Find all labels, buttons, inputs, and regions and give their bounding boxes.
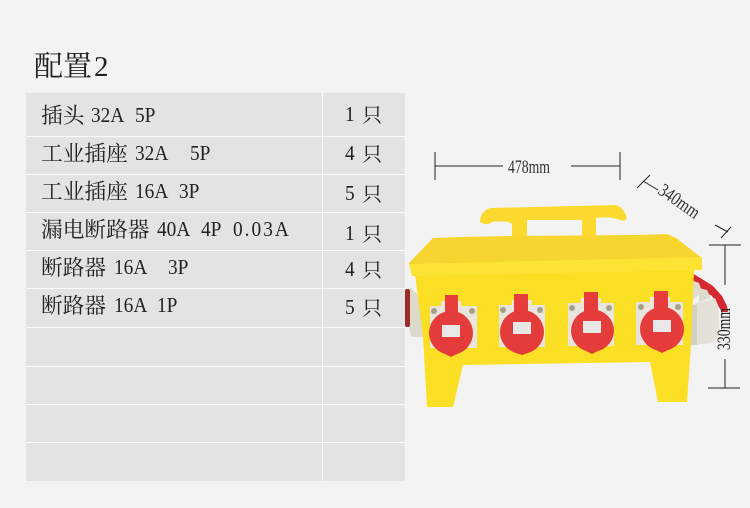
row 2 quantity [345, 138, 382, 167]
row 4 quantity: 1 [345, 221, 355, 245]
socket 2 [499, 294, 545, 355]
row 3 item: 工业插座 [41, 175, 128, 206]
row 5 item: 3P [168, 255, 188, 279]
socket 4 [636, 291, 684, 353]
row 5 item: 断路器 [41, 251, 106, 282]
row 4 quantity [345, 218, 382, 247]
row 3 quantity [345, 178, 382, 207]
left side plug [405, 287, 423, 337]
row 1 item: 5P [135, 103, 155, 127]
row 6 quantity: 5 [345, 295, 355, 319]
row 5 item [41, 251, 188, 282]
row 1 item [41, 99, 155, 130]
row 6 item: 16A [114, 293, 147, 317]
row 3 quantity: 只 [362, 178, 382, 207]
box body [415, 270, 694, 407]
row 2 item [41, 137, 210, 168]
dimension: depth 340mm: 340mm [654, 180, 704, 224]
dimension: height 330mm: 330mm [714, 308, 735, 350]
row 2 item: 工业插座 [41, 137, 128, 168]
row 6 item [41, 289, 177, 320]
row 5 quantity [345, 254, 382, 283]
row 4 item [41, 213, 291, 244]
row 1 quantity: 1 [345, 102, 355, 126]
dimension: depth 340mm [637, 175, 731, 238]
row 3 item: 16A [135, 179, 168, 203]
row 2 quantity: 4 [345, 141, 355, 165]
lid handle [480, 205, 627, 238]
row 6 item: 1P [157, 293, 177, 317]
row 3 quantity: 5 [345, 181, 355, 205]
title: 配置2 [34, 44, 109, 85]
row 1 item: 32A [91, 103, 124, 127]
row 4 item: 4P [201, 217, 221, 241]
row 4 quantity: 只 [362, 218, 382, 247]
row 1 quantity: 只 [362, 99, 382, 128]
row 6 quantity: 只 [362, 292, 382, 321]
row 2 item: 5P [190, 141, 210, 165]
socket 1 [429, 295, 477, 357]
row 5 item: 16A [114, 255, 147, 279]
row 6 item: 断路器 [41, 289, 106, 320]
row 3 item [41, 175, 199, 206]
lid [409, 234, 702, 276]
socket 3 [568, 292, 614, 354]
row 5 quantity: 4 [345, 257, 355, 281]
product: yellow distribution box [405, 205, 728, 407]
row 1 quantity [345, 99, 382, 128]
row 5 quantity: 只 [362, 254, 382, 283]
dimension: width 478mm [435, 152, 620, 180]
dimension: height 330mm [708, 245, 741, 388]
row 1 item: 插头 [41, 99, 84, 130]
row 4 item: 漏电断路器 [41, 213, 149, 244]
row 2 item: 32A [135, 141, 168, 165]
row 3 item: 3P [179, 179, 199, 203]
dimension: width 478mm: 478mm [508, 157, 550, 178]
specification table [26, 93, 405, 481]
row 2 quantity: 只 [362, 138, 382, 167]
row 4 item: 40A [157, 217, 190, 241]
row 6 quantity [345, 292, 382, 321]
right side plug and cable [690, 273, 728, 345]
row 4 item: 0.03A [233, 217, 291, 241]
